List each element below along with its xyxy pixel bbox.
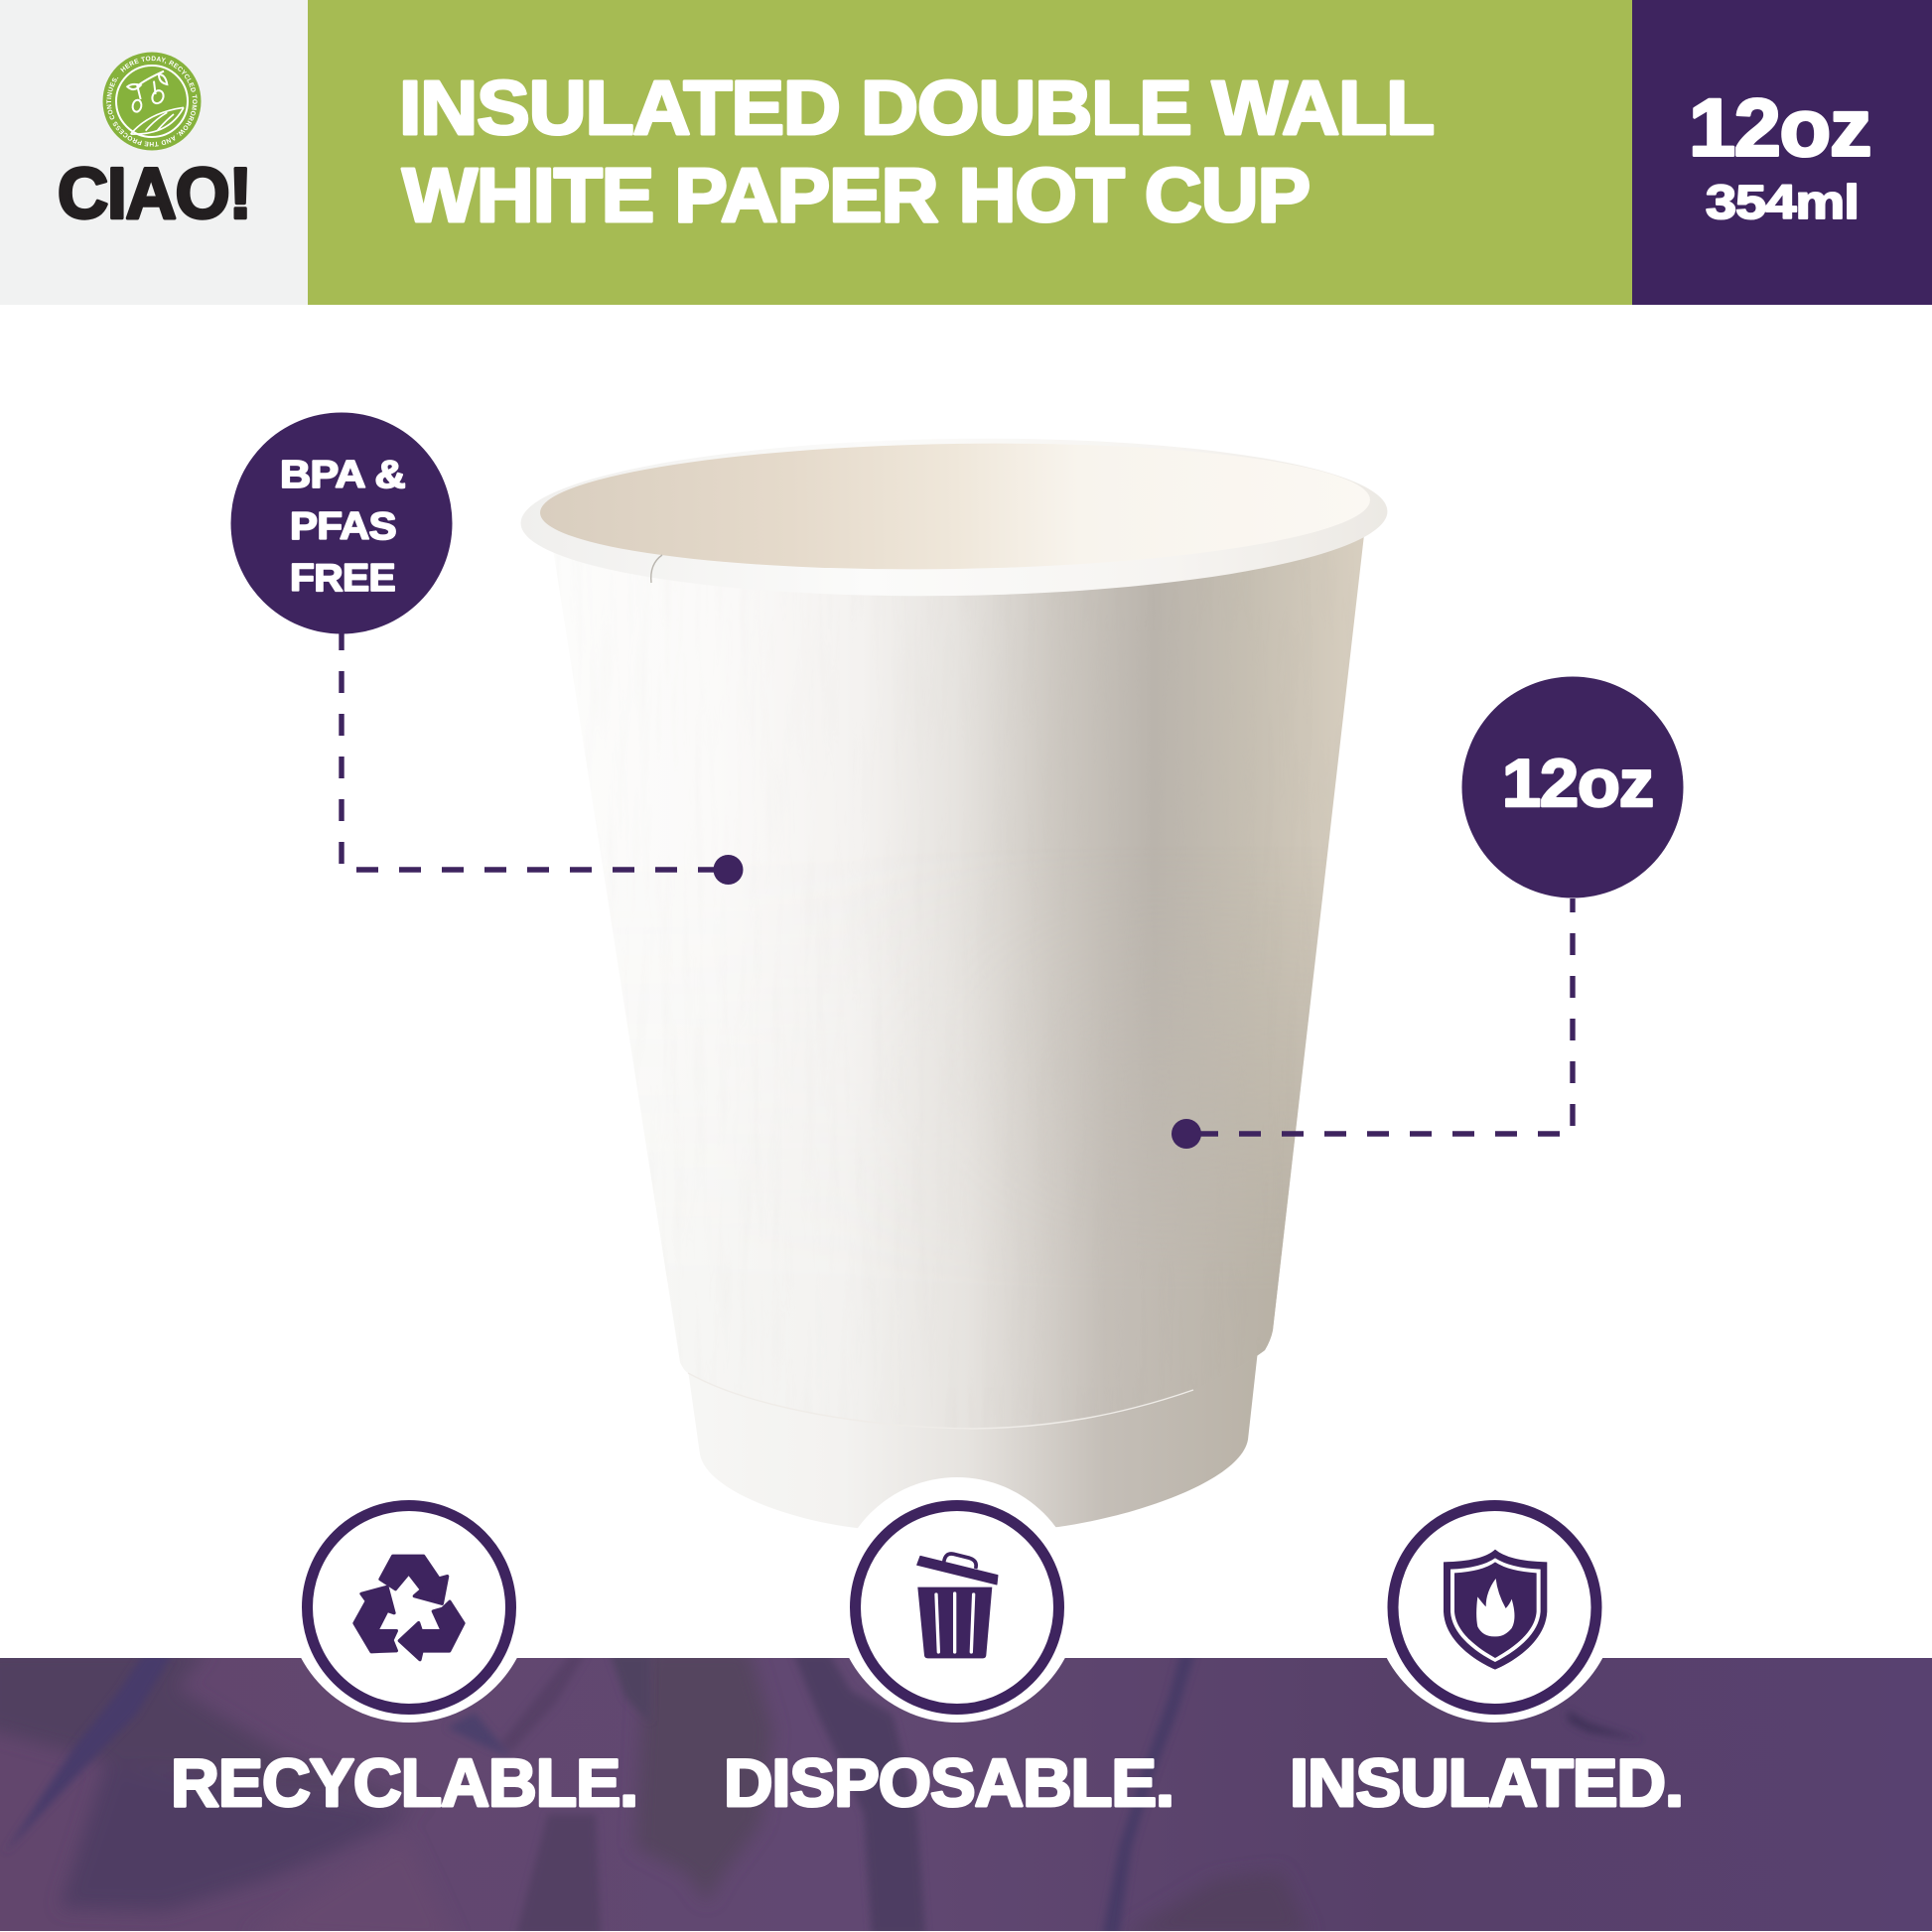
badge circle	[230, 413, 453, 633]
callout: bpa and pfas free	[230, 413, 743, 885]
callout: 12oz	[1172, 677, 1684, 1149]
cup rim	[519, 433, 1389, 602]
cup lower sleeve	[688, 1350, 1258, 1532]
badge text: 12oz	[1502, 746, 1653, 821]
badge text	[280, 454, 405, 600]
logo: ciao	[58, 52, 251, 234]
cup interior	[539, 437, 1371, 576]
label: RECYCLABLE.	[171, 1745, 637, 1821]
rim seam	[651, 555, 662, 583]
product: white paper cup	[519, 433, 1389, 1532]
leader line	[342, 632, 720, 870]
badge circle	[1461, 677, 1684, 897]
size badge: 12oz 354ml	[1689, 83, 1870, 229]
header band	[0, 0, 1932, 305]
leader line	[1196, 898, 1573, 1134]
cup lower shading	[1231, 969, 1314, 1371]
cup body wall	[551, 526, 1365, 1429]
feature: insulated	[1290, 1505, 1683, 1821]
label: INSULATED.	[1290, 1745, 1683, 1821]
size badge: 12oz 354ml: 354ml	[1706, 177, 1859, 229]
icon ring	[856, 1505, 1058, 1710]
size badge: 12oz 354ml: 12oz	[1689, 83, 1870, 173]
feature: disposable	[724, 1505, 1173, 1821]
title: WHITE PAPER HOT CUP	[402, 153, 1310, 238]
feature: recyclable	[171, 1505, 637, 1821]
label: DISPOSABLE.	[724, 1745, 1173, 1821]
icon ring	[1393, 1505, 1596, 1710]
title	[399, 66, 1434, 238]
footer band with leaf texture	[0, 1648, 1932, 1932]
icon ring	[308, 1505, 510, 1710]
white halos behind icons	[286, 1477, 1617, 1723]
icon: trash bin	[917, 1554, 998, 1658]
title: INSULATED DOUBLE WALL	[399, 66, 1434, 151]
icon: shield with flame	[1444, 1550, 1547, 1670]
badge text: BPA &	[280, 454, 405, 496]
logo wordmark: CIAO!	[58, 155, 251, 234]
icon: circular olive badge: HERE TODAY, RECYCLED TOMORROW. AND THE PROCESS CONTINUES.	[106, 56, 198, 147]
leader dot	[1172, 1119, 1201, 1149]
badge text: PFAS	[290, 505, 396, 548]
badge text: FREE	[290, 557, 395, 600]
icon: recycle arrows	[354, 1556, 464, 1660]
cup groove line	[688, 1373, 1193, 1429]
leader dot	[713, 855, 743, 885]
cup paper grain	[546, 526, 1370, 1430]
